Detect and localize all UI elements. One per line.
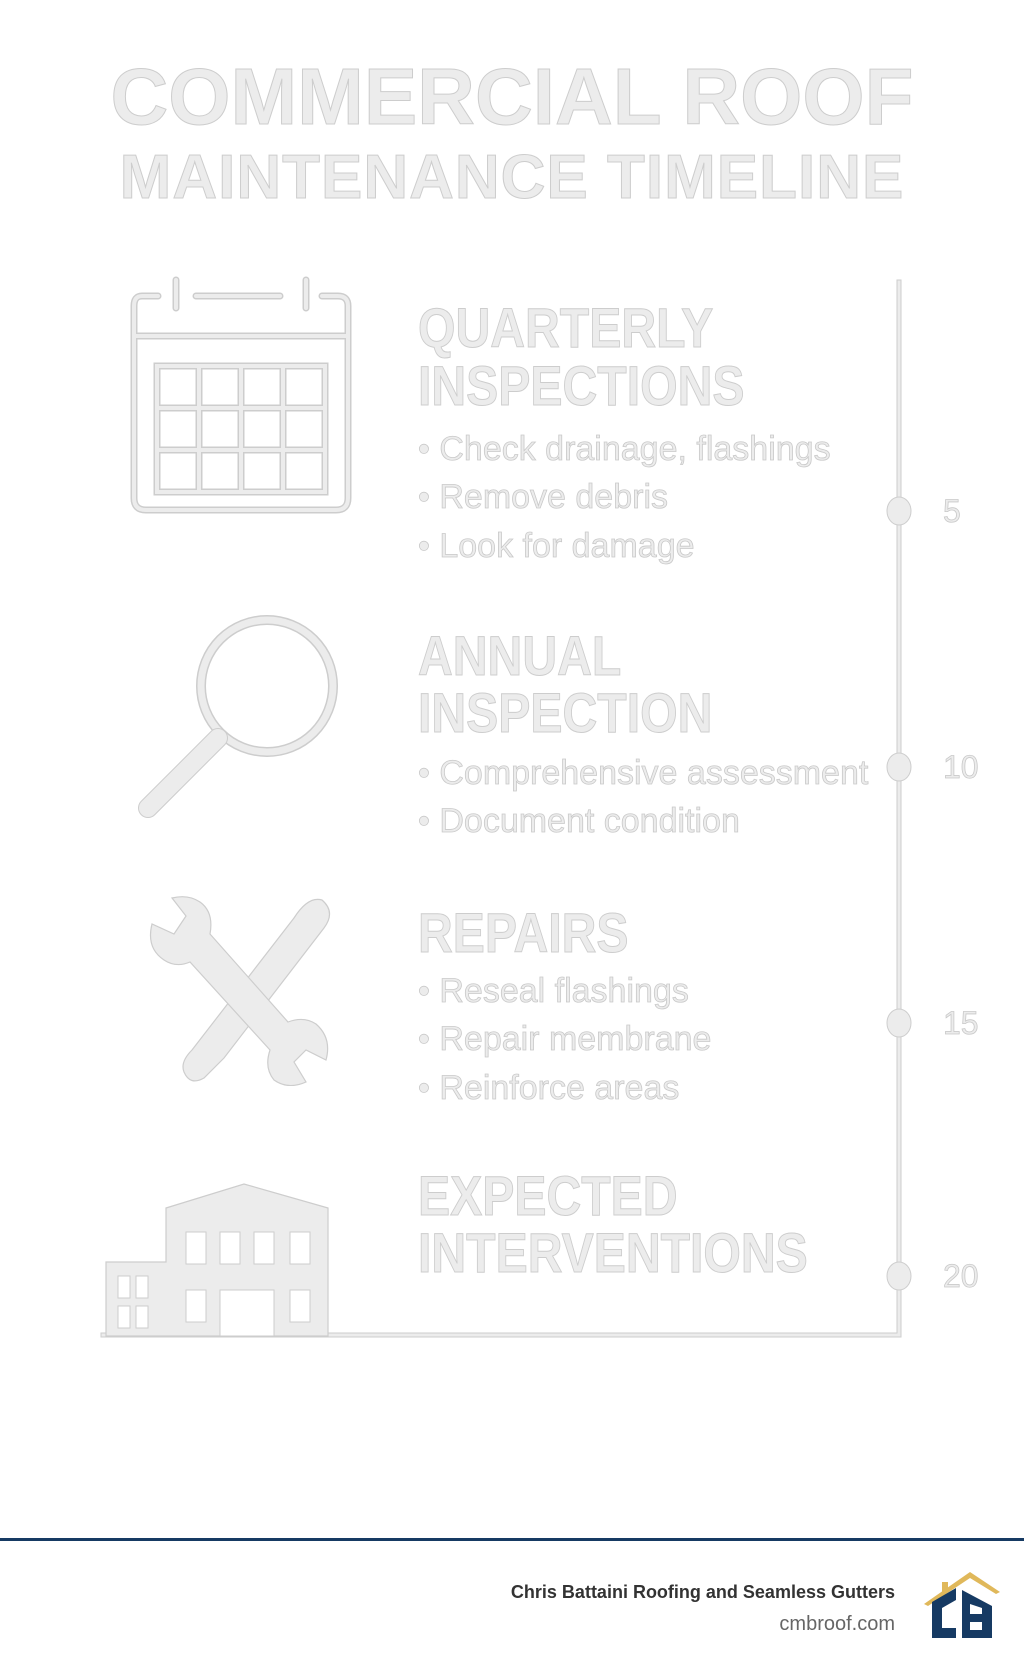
text: INSPECTION — [418, 681, 712, 744]
icon: magnifier — [138, 615, 338, 818]
text: • Look for damage — [418, 527, 695, 565]
text: ANNUAL — [418, 624, 621, 687]
footer company name: Chris Battaini Roofing and Seamless Gutters — [511, 1582, 895, 1602]
text: • Document condition — [418, 802, 740, 840]
heading: annual — [418, 624, 712, 744]
text: EXPECTED — [418, 1164, 678, 1227]
bullets: quarterly — [418, 430, 831, 565]
heading: expected interventions — [418, 1164, 808, 1284]
bullets: annual — [418, 754, 868, 840]
text: INTERVENTIONS — [418, 1221, 808, 1284]
footer rule — [0, 1538, 1024, 1541]
text: • Remove debris — [418, 478, 668, 516]
bullets: repairs — [418, 972, 711, 1107]
text: 5 — [943, 493, 961, 529]
text: • Check drainage, flashings — [418, 430, 831, 468]
heading: repairs: REPAIRS — [418, 901, 629, 964]
icon: tools — [150, 896, 330, 1086]
subtitle: MAINTENANCE TIMELINE — [120, 143, 904, 212]
logo — [924, 1572, 1000, 1638]
text: 10 — [943, 749, 979, 785]
text: • Comprehensive assessment — [418, 754, 868, 792]
icon: calendar — [130, 276, 352, 514]
text: • Reinforce areas — [418, 1069, 679, 1107]
icon: building — [105, 1184, 329, 1336]
title: COMMERCIAL ROOF — [111, 52, 913, 141]
text: QUARTERLY — [418, 296, 713, 359]
text: • Repair membrane — [418, 1020, 711, 1058]
text: 15 — [943, 1005, 979, 1041]
heading: quarterly — [418, 296, 744, 417]
footer url: cmbroof.com — [779, 1613, 895, 1635]
text: • Reseal flashings — [418, 972, 689, 1010]
text: 20 — [943, 1258, 979, 1294]
text: INSPECTIONS — [418, 354, 744, 417]
numbers — [943, 493, 979, 1294]
